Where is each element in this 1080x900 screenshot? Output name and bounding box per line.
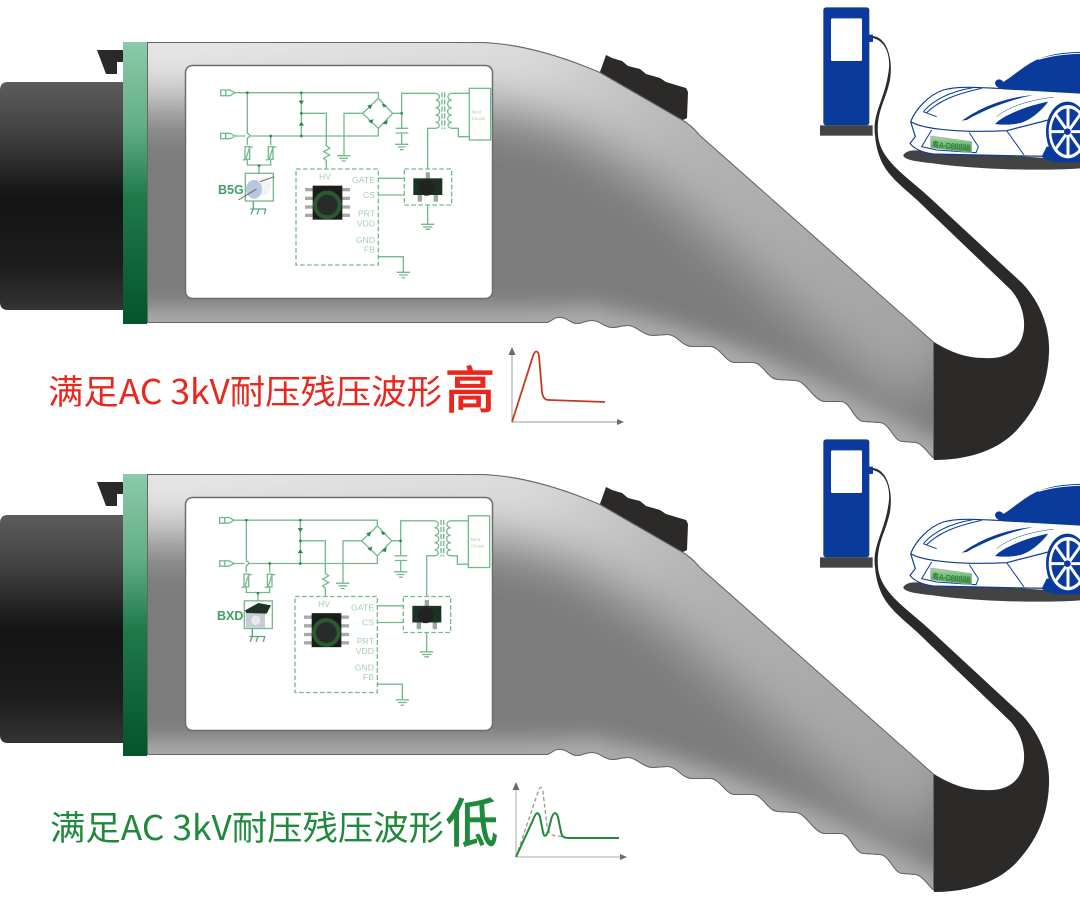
chips [305,172,442,220]
circuit labels: Circuit [471,543,485,548]
circuit labels: CS [362,617,374,627]
cable and tail [872,36,1049,460]
circuit labels: CS [363,190,375,200]
circuit labels: PRT [358,208,376,218]
grip [600,487,688,552]
component: B5G [218,177,274,200]
circuit wiring [220,516,490,705]
charging station: top [820,7,873,136]
cable and tail [872,468,1049,892]
connector assembly: top [0,20,1049,480]
circuit labels [318,537,485,682]
circuit labels: GND [355,662,374,672]
plug barrel [0,82,126,310]
plug barrel [0,515,126,743]
car: bottom [903,484,1080,602]
charger body [100,452,960,900]
latch [97,50,123,74]
circuit labels: GATE [351,602,374,612]
green band [123,42,147,324]
waveform: low [512,782,627,860]
emphasis: 高: 高 [445,351,495,423]
circuit labels: GATE [352,175,375,185]
panel background [186,498,492,730]
charging station: bottom [820,439,873,568]
circuit labels: HV [318,599,330,609]
grip [600,55,688,120]
circuit labels [319,110,486,255]
caption text: 满足AC 3kV耐压残压波形 [50,801,444,850]
caption: top [48,347,624,425]
circuit labels: VDD [356,646,374,656]
latch [97,482,123,506]
circuit labels: GND [356,235,375,245]
component: BXD: BXD [217,609,243,623]
car: top [903,52,1080,170]
panel background [186,66,492,298]
license plate: 粤A-D88888 [932,571,971,584]
circuit labels: HV [319,171,331,181]
circuit labels: FB [364,245,375,255]
circuit labels: PRT [357,636,375,646]
circuit labels: Next [471,537,481,542]
license plate: 粤A-D88888 [932,139,971,152]
caption text: 满足AC 3kV耐压残压波形 [48,365,442,414]
caption: bottom [50,782,627,860]
green band [123,474,147,756]
panel: circuit top [186,66,492,298]
charger body [100,20,960,480]
circuit wiring [221,88,491,278]
component: BXD [217,603,271,628]
chips [304,600,441,647]
circuit labels: Circuit [472,116,486,121]
component: B5G: B5G [218,183,244,197]
panel: circuit bottom [186,498,492,730]
waveform: high [508,347,624,425]
circuit labels: VDD [357,218,375,228]
connector assembly: bottom [0,452,1049,900]
circuit labels: FB [363,672,374,682]
circuit labels: Next [472,110,482,115]
emphasis: 低: 低 [446,782,498,857]
